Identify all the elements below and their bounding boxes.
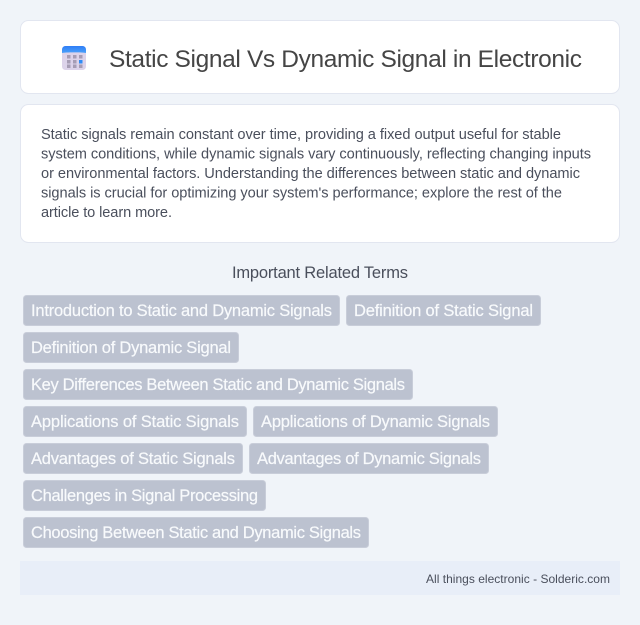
tag: challenges in signal processing <box>24 480 266 510</box>
text block: summary paragraph: Static signals remain constant over time, providing a fixed output useful for stable <box>41 127 561 143</box>
tag: applications of static signals: Applications of Static Signals <box>31 413 239 431</box>
footer <box>20 561 620 595</box>
tag: applications of static signals <box>24 406 246 436</box>
tag: key differences <box>24 370 412 400</box>
tag: advantages of static signals <box>24 444 242 474</box>
footer: All things electronic - Solderic.com <box>426 572 610 586</box>
tag: introduction: Introduction to Static and Dynamic Signals <box>31 302 332 320</box>
text block: summary paragraph: signals is crucial for optimizing your system's performance; explore the rest of the <box>41 186 562 202</box>
panel: summary card <box>20 104 620 242</box>
panel: related term tags <box>24 296 540 548</box>
heading: important related terms: Important Related Terms <box>232 264 408 282</box>
title: Static Signal Vs Dynamic Signal in Electronic <box>109 46 582 73</box>
tag: choosing between: Choosing Between Static and Dynamic Signals <box>31 524 361 542</box>
text block: summary paragraph <box>41 127 591 221</box>
tag: definition of static signal: Definition of Static Signal <box>354 302 533 320</box>
tag: advantages of static signals: Advantages of Static Signals <box>31 450 235 468</box>
tag: introduction <box>24 296 340 326</box>
tag: challenges in signal processing: Challenges in Signal Processing <box>31 487 258 505</box>
tag: advantages of dynamic signals <box>250 444 488 474</box>
tag: advantages of dynamic signals: Advantages of Dynamic Signals <box>257 450 481 468</box>
tag: applications of dynamic signals: Applications of Dynamic Signals <box>261 413 490 431</box>
panel: header card <box>20 20 620 94</box>
tag: applications of dynamic signals <box>254 406 498 436</box>
icon: calendar <box>62 46 86 70</box>
text block: summary paragraph: article to learn more. <box>41 205 172 221</box>
tag: definition of dynamic signal <box>24 332 238 362</box>
tag: definition of dynamic signal: Definition of Dynamic Signal <box>31 339 231 357</box>
text block: summary paragraph: system conditions, while dynamic signals vary continuously, reflecting changing inputs <box>41 146 591 162</box>
tag: choosing between <box>24 518 368 548</box>
tag: definition of static signal <box>346 296 540 326</box>
text block: summary paragraph: or environmental factors. Understanding the differences between static and dynamic <box>41 166 580 182</box>
tag: key differences: Key Differences Between Static and Dynamic Signals <box>31 376 405 394</box>
